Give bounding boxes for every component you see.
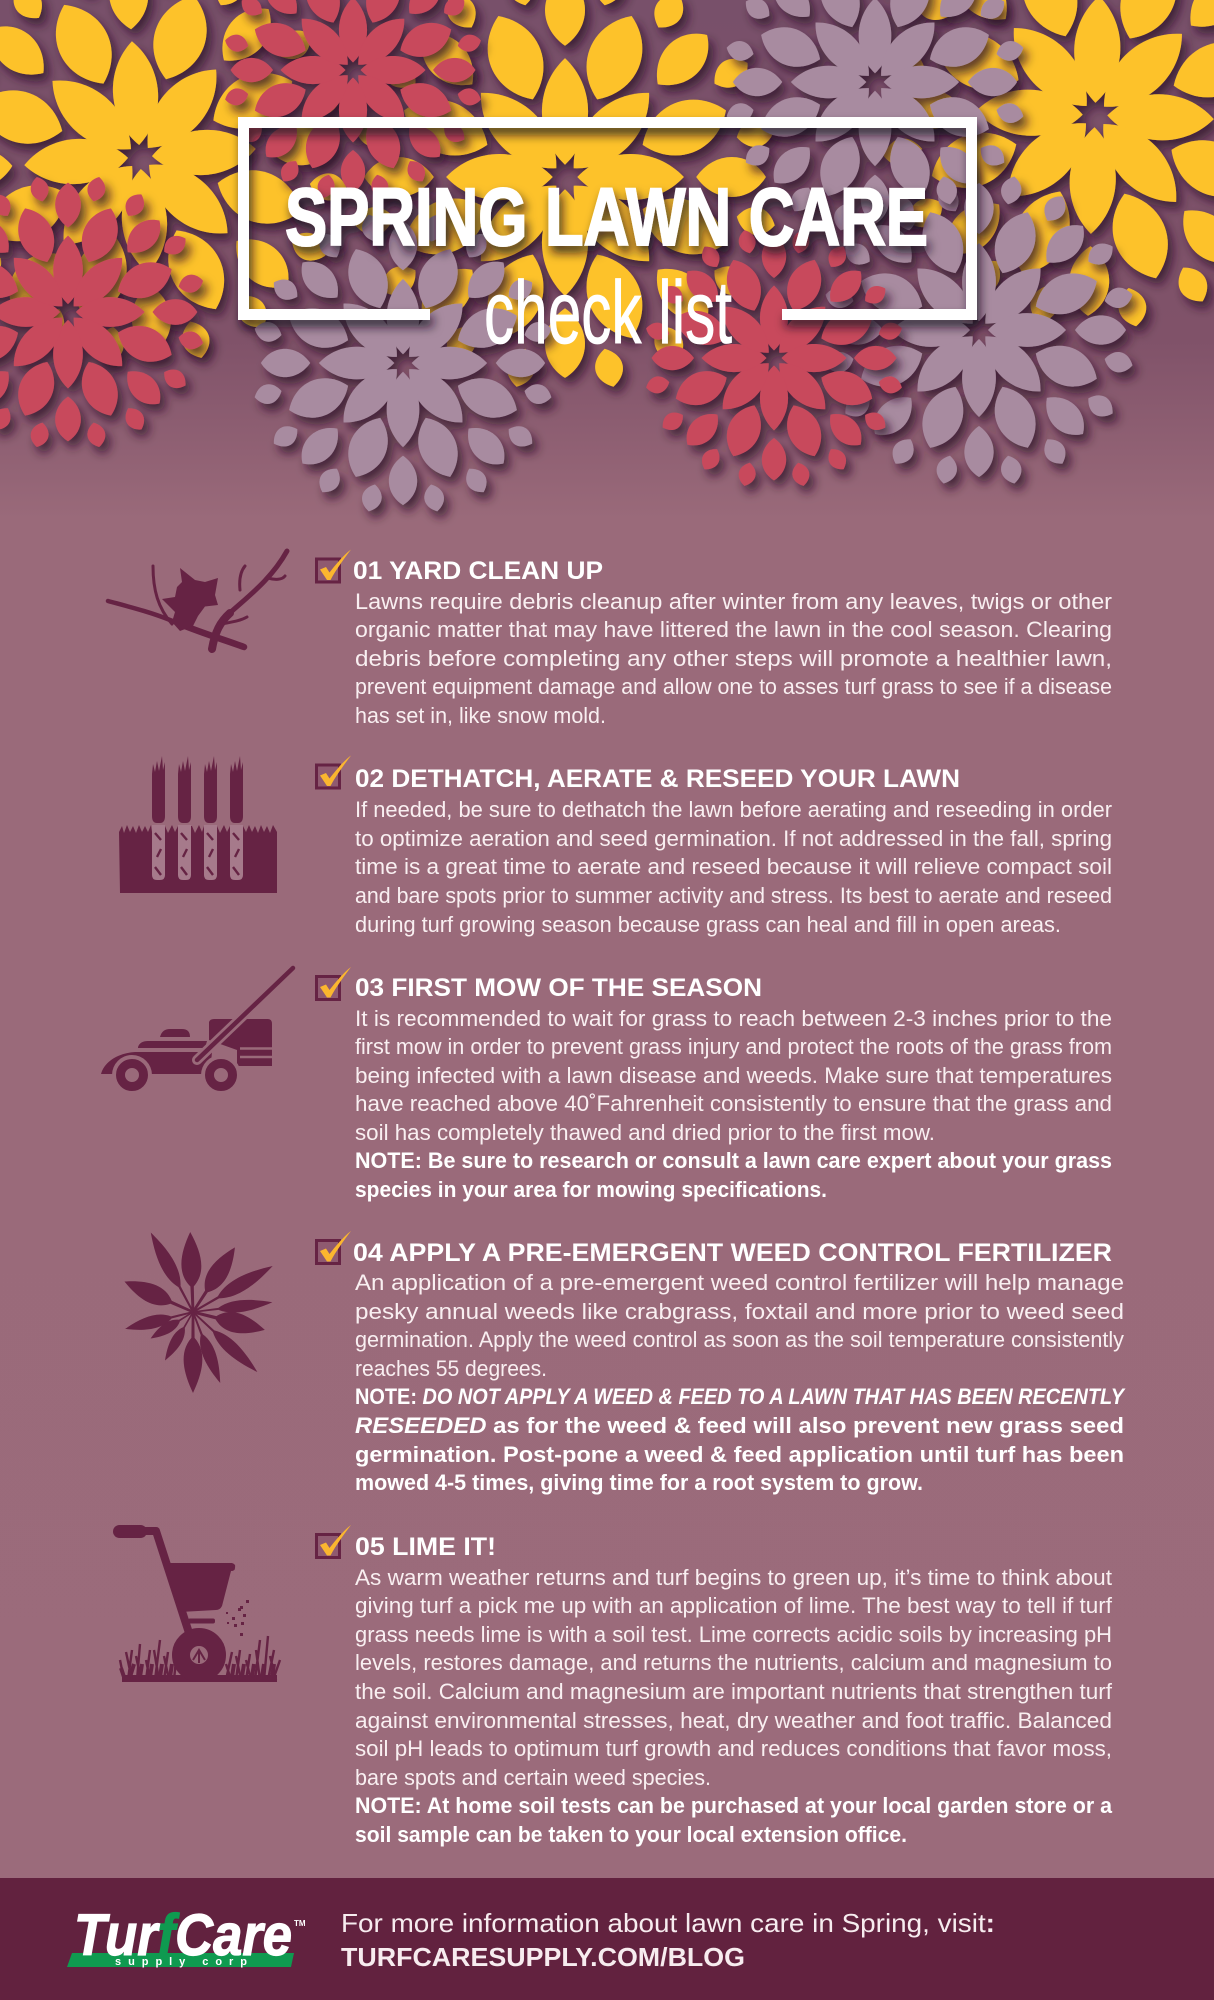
heading: 03 FIRST MOW OF THE SEASON: [355, 974, 762, 1002]
body text: [355, 1270, 1126, 1495]
section 01: yard clean up: [108, 550, 1113, 728]
body text: NOTE: DO NOT APPLY A WEED & FEED TO A LAWN THAT HAS BEEN RECENTLY: [355, 1384, 1126, 1409]
body text: debris before completing any other steps will promote a healthier lawn,: [355, 646, 1112, 671]
body text: has set in, like snow mold.: [355, 703, 606, 728]
body text: against environmental stresses, heat, dry weather and foot traffic. Balanced: [355, 1708, 1112, 1733]
body text: [355, 589, 1113, 728]
icon: lawn mower: [101, 968, 293, 1095]
checkbox: [316, 1231, 351, 1264]
checkbox: [316, 756, 351, 788]
body text: bare spots and certain weed species.: [355, 1765, 711, 1790]
section 03: first mow: [101, 967, 1112, 1202]
body text: giving turf a pick me up with an application of lime. The best way to tell if turf: [355, 1593, 1113, 1618]
flower: yellow left: [0, 0, 362, 379]
flower: red top: [223, 0, 483, 200]
body text: [355, 1006, 1112, 1202]
body text: first mow in order to prevent grass injury and protect the roots of the grass from: [355, 1034, 1112, 1059]
icon: weed: [121, 1229, 276, 1393]
checkbox: [316, 1525, 351, 1558]
body text: An application of a pre-emergent weed control fertilizer will help manage: [355, 1270, 1124, 1295]
body text: to optimize aeration and seed germination. If not addressed in the fall, spring: [355, 826, 1112, 851]
body text: It is recommended to wait for grass to reach between 2-3 inches prior to the: [355, 1006, 1112, 1031]
body text: grass needs lime is with a soil test. Lime corrects acidic soils by increasing pH: [355, 1622, 1112, 1647]
heading: 01 YARD CLEAN UP: [353, 557, 603, 585]
body text: reaches 55 degrees.: [355, 1356, 547, 1381]
call to action: For more information about lawn care in Spring, visit :: [341, 1908, 995, 1938]
body text: soil sample can be taken to your local extension office.: [355, 1822, 907, 1847]
body text: [355, 1565, 1113, 1847]
heading: 02 DETHATCH, AERATE & RESEED YOUR LAWN: [355, 765, 960, 793]
body text: [355, 797, 1112, 937]
section 02: dethatch, aerate and reseed: [119, 756, 1112, 937]
section 05: lime it: [113, 1525, 1113, 1847]
title: SPRING LAWN CARE: [285, 172, 928, 263]
body text: organic matter that may have littered the lawn in the cool season. Clearing: [355, 617, 1112, 642]
icon: soil plugs and aeration holes: [119, 756, 277, 893]
body text: time is a great time to aerate and reseed because it will relieve compact soil: [355, 854, 1112, 879]
flower: yellow right: [875, 0, 1214, 335]
logo: TM: [294, 1919, 306, 1928]
flower: yellow center: [352, 0, 778, 390]
body text: levels, restores damage, and returns the nutrients, calcium and magnesium to: [355, 1650, 1112, 1675]
flower: red center-right: [644, 228, 904, 488]
body text: Lawns require debris cleanup after winter from any leaves, twigs or other: [355, 589, 1113, 614]
icon: twigs and maple leaf: [108, 551, 287, 649]
body text: the soil. Calcium and magnesium are important nutrients that strengthen turf: [355, 1679, 1113, 1704]
subtitle: check list: [484, 262, 732, 362]
body text: soil pH leads to optimum turf growth and reduces conditions that favor moss,: [355, 1736, 1112, 1761]
decorative flower header: [0, 0, 1214, 514]
body text: RESEEDED as for the weed & feed will also prevent new grass seed: [355, 1413, 1124, 1438]
checkbox: [316, 550, 351, 582]
logo: supply corp: [115, 1956, 247, 1968]
body text: NOTE: At home soil tests can be purchased at your local garden store or a: [355, 1793, 1112, 1818]
body text: species in your area for mowing specifications.: [355, 1177, 827, 1202]
body text: during turf growing season because grass can heal and fill in open areas.: [355, 912, 1061, 937]
icon: lime spreader: [113, 1525, 280, 1682]
body text: germination. Apply the weed control as soon as the soil temperature consistently: [355, 1327, 1125, 1352]
body text: have reached above 40˚Fahrenheit consistently to ensure that the grass and: [355, 1091, 1112, 1116]
body text: prevent equipment damage and allow one to asses turf grass to see if a disease: [355, 674, 1112, 699]
body text: and bare spots prior to summer activity and stress. Its best to aerate and reseed: [355, 883, 1112, 908]
section 04: pre-emergent weed control: [121, 1229, 1126, 1495]
call to action: TURFCARESUPPLY.COM/BLOG: [341, 1942, 745, 1972]
body text: pesky annual weeds like crabgrass, foxtail and more prior to weed seed: [355, 1299, 1124, 1324]
flower: grey center: [252, 212, 554, 514]
footer: [0, 1878, 1214, 2000]
body text: mowed 4-5 times, giving time for a root system to grow.: [355, 1470, 923, 1495]
call to action: [341, 1908, 995, 1972]
body text: NOTE: Be sure to research or consult a lawn care expert about your grass: [355, 1148, 1112, 1173]
heading: 05 LIME IT!: [355, 1533, 496, 1561]
body text: As warm weather returns and turf begins to green up, it’s time to think about: [355, 1565, 1113, 1590]
checkbox: [316, 967, 351, 1000]
body text: If needed, be sure to dethatch the lawn before aerating and reseeding in order: [355, 797, 1112, 822]
heading: 04 APPLY A PRE-EMERGENT WEED CONTROL FERTILIZER: [353, 1239, 1112, 1267]
flower: grey right: [823, 174, 1135, 486]
logo: TurfCare: [74, 1903, 292, 1968]
title frame: [244, 122, 972, 314]
flower: red left: [0, 175, 205, 449]
body text: being infected with a lawn disease and weeds. Make sure that temperatures: [355, 1063, 1112, 1088]
body text: soil has completely thawed and dried prior to the first mow.: [355, 1120, 935, 1145]
body text: germination. Post-pone a weed & feed application until turf has been: [355, 1442, 1124, 1467]
flower: grey top: [724, 0, 1026, 233]
